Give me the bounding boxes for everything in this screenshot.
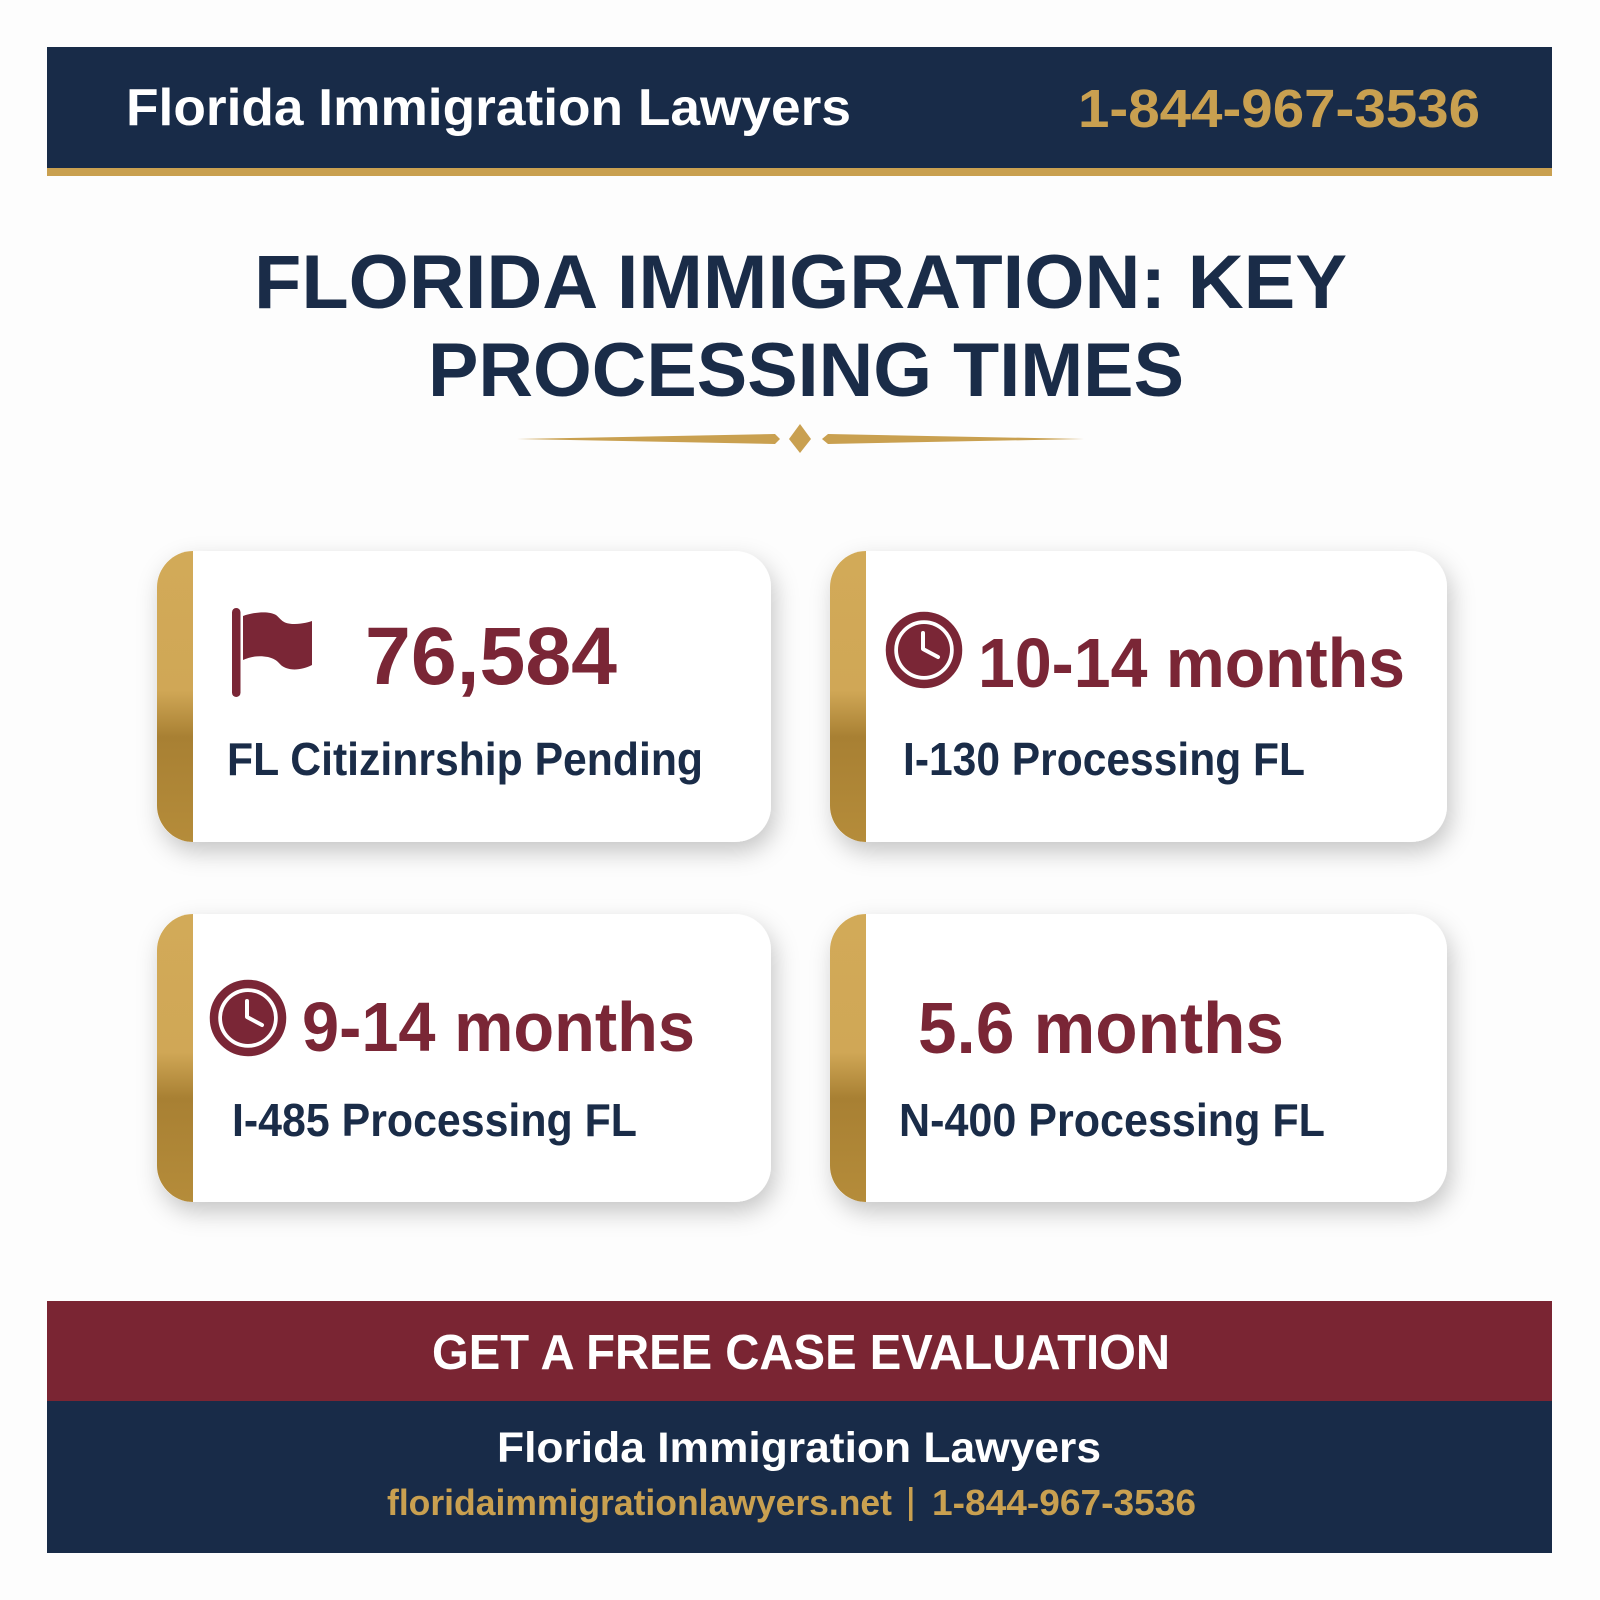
- header firm name: Florida Immigration Lawyers: [126, 79, 851, 137]
- footer panel: [47, 1401, 1552, 1553]
- ornamental divider: [517, 424, 1084, 453]
- icon: flag: [232, 608, 312, 697]
- title: PROCESSING TIMES: [428, 328, 1184, 413]
- statistic: 10-14 months: 10-14 months: [978, 624, 1405, 702]
- panel: I-485 processing: [157, 914, 771, 1202]
- header bar: [47, 47, 1552, 176]
- footer website and phone: [387, 1482, 1196, 1523]
- icon: clock: [214, 984, 282, 1052]
- label: I-130 processing FL: I-130 Processing FL: [903, 733, 1305, 785]
- label: FL citizenship pending: FL Citizinrship Pending: [227, 733, 703, 785]
- footer firm name: Florida Immigration Lawyers: [497, 1424, 1101, 1472]
- label: N-400 processing FL: N-400 Processing FL: [899, 1094, 1325, 1146]
- label: I-485 processing FL: I-485 Processing FL: [232, 1094, 637, 1146]
- panel: FL citizenship pending: [157, 551, 771, 842]
- statistic: 5.6 months: 5.6 months: [918, 989, 1284, 1069]
- panel: I-130 processing: [830, 551, 1447, 842]
- title: [254, 240, 1347, 413]
- footer website and phone: floridaimmigrationlawyers.net: [387, 1482, 892, 1523]
- statistic: 76,584: 76,584: [365, 611, 617, 702]
- icon: clock: [890, 616, 958, 684]
- footer website and phone: 1-844-967-3536: [932, 1482, 1196, 1523]
- panel: N-400 processing: [830, 914, 1447, 1202]
- call to action banner: [47, 1301, 1552, 1401]
- statistic: 9-14 months: 9-14 months: [302, 988, 695, 1066]
- title: FLORIDA IMMIGRATION: KEY: [254, 240, 1347, 325]
- call to action banner: GET A FREE CASE EVALUATION: [432, 1326, 1170, 1380]
- header phone number: 1-844-967-3536: [1078, 79, 1480, 139]
